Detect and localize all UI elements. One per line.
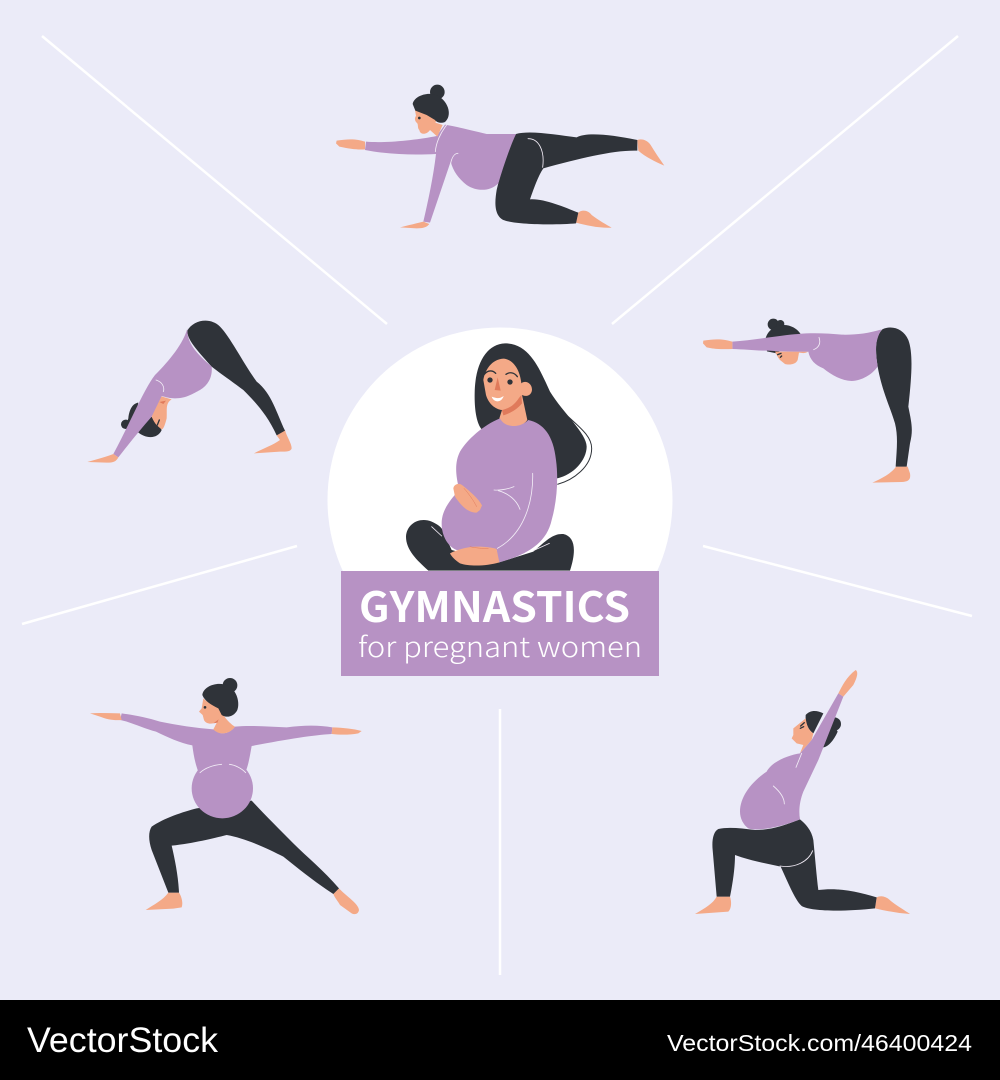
footer image reference: VectorStock.com/46400424 — [667, 1030, 972, 1056]
pose: low lunge, bottom right — [695, 670, 910, 914]
pose: warrior, bottom left — [90, 678, 362, 914]
footer bar — [0, 1000, 1000, 1080]
pose: downward dog, left — [87, 321, 292, 463]
panel: title banner — [341, 571, 659, 676]
heading: GYMNASTICS: GYMNASTICS — [359, 574, 630, 635]
pose: table balance, top — [336, 85, 664, 228]
pose: forward bend, right — [703, 319, 912, 483]
footer logo text: VectorStock — [27, 1021, 219, 1060]
panel: white circle backdrop — [328, 328, 672, 672]
subheading: for pregnant women — [358, 626, 642, 666]
central seated pregnant woman — [406, 343, 592, 571]
